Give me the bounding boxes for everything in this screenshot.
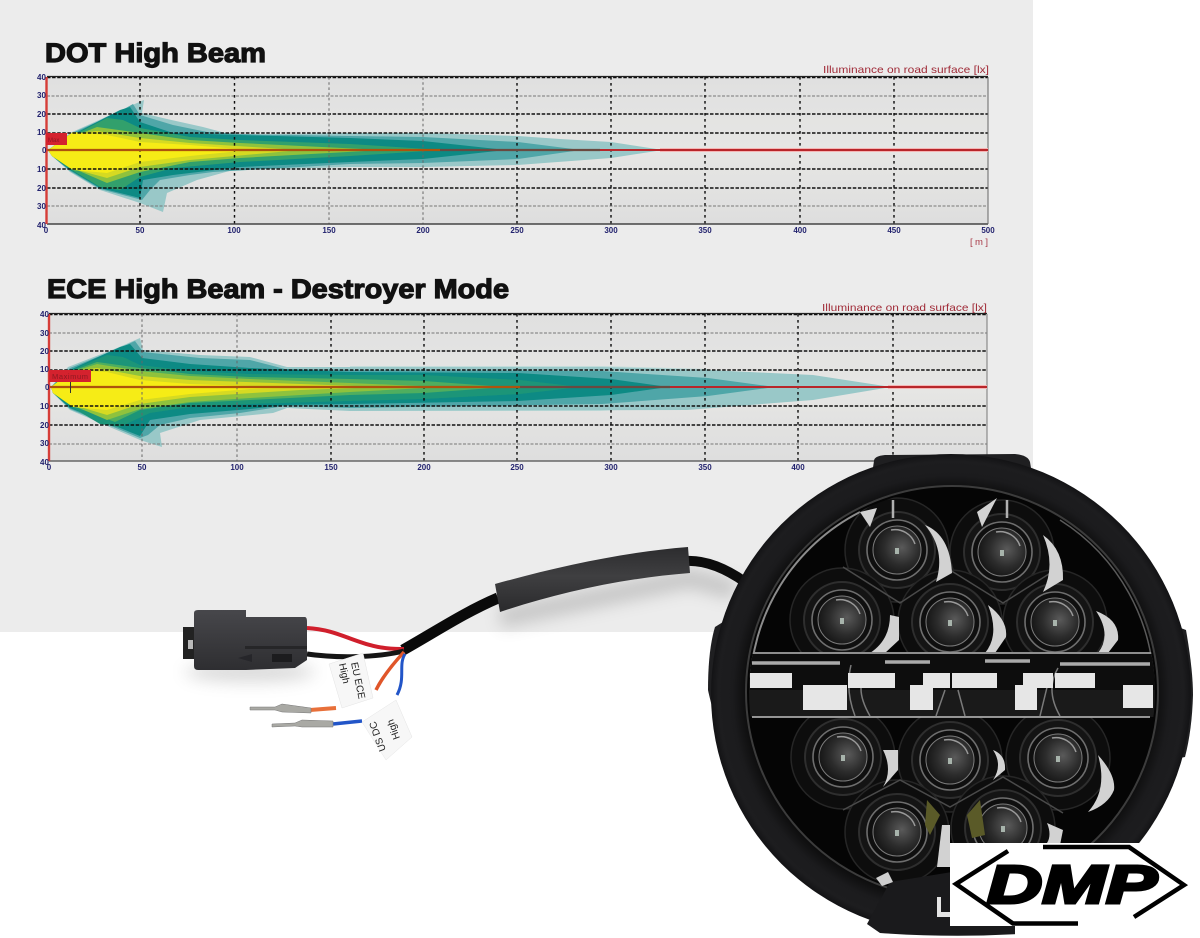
x axis labels: 150 [324,463,338,472]
x axis labels: 0 [44,226,49,235]
x axis labels: 350 [698,463,712,472]
LED module lower centre [898,708,1002,812]
reflector crescents [860,498,1118,867]
connector housing [183,610,307,670]
label: EU ECE High [329,653,373,708]
axes and range line [49,314,987,461]
y axis labels: 10 [40,365,49,374]
y axis labels: 40 [37,73,46,82]
LED module middle right [1002,570,1108,652]
heat shrink sleeve [495,547,690,612]
DMP logo [950,843,1200,938]
lens bezel [746,486,1158,898]
maximum marker [46,133,67,145]
y axis labels: 40 [37,221,46,230]
label: US DC High: US DC [368,720,389,753]
wires [307,628,405,724]
y axis labels: 20 [40,421,49,430]
beam pattern DOT [48,100,663,212]
LED module lower right [1006,706,1110,810]
x axis labels: 200 [416,226,430,235]
beam pattern ECE [51,338,891,447]
panel: DOT high beam chart [37,38,995,248]
y axis labels: 30 [40,329,49,338]
x axis labels: 350 [698,226,712,235]
lower housing plate [867,872,1020,936]
x axis labels [44,226,995,235]
bezel highlight [750,512,860,690]
x axis labels: 300 [604,226,618,235]
axes and range line [46,76,988,224]
grey backdrop panel [0,0,1033,632]
y axis labels [37,73,47,230]
y axis labels: 20 [37,184,46,193]
logo chevron outline [956,847,1184,924]
x axis labels [47,463,805,472]
cast shadows [185,578,735,682]
x axis labels: 250 [510,226,524,235]
y axis labels: 0 [45,383,50,392]
bezel highlight right [1060,520,1154,690]
legend title: Illuminance on road surface [lx] [822,302,987,314]
x axis unit: [m] [970,237,988,248]
horizontal and vertical grid [49,314,987,461]
y axis labels: 10 [37,165,46,174]
LED module top left [845,498,949,602]
x axis labels: 200 [417,463,431,472]
wiring harness [183,547,745,760]
heading: DOT High Beam: DOT High Beam [45,38,266,68]
legend title: Illuminance on road surface [lx] [823,64,989,76]
heading: ECE High Beam Destroyer Mode: ECE High Beam - Destroyer Mode [47,274,509,304]
y axis labels: 0 [42,146,47,155]
plate glint [876,872,893,886]
y axis labels [40,310,50,467]
cell dividers [843,567,1063,813]
y axis labels: 40 [40,310,49,319]
y axis labels: 30 [37,91,46,100]
x axis labels: 50 [136,226,145,235]
x axis labels: 500 [981,226,995,235]
plate badge [937,897,950,917]
label: EU ECE High: High [336,662,351,685]
horizontal and vertical grid [47,77,988,224]
x axis labels: 300 [604,463,618,472]
olive reflections [925,800,985,838]
LED module middle centre [898,570,1002,652]
x axis labels: 100 [227,226,241,235]
LED module bottom right [950,775,1056,843]
y axis labels: 30 [40,439,49,448]
lens internals [748,498,1156,884]
x axis labels: 0 [47,463,52,472]
maximum marker: Maximum [52,372,88,381]
y axis labels: 10 [37,128,46,137]
maximum marker [49,370,91,393]
chrome stems [893,500,1007,518]
main black cable [403,598,498,650]
housing outer ring [711,454,1191,934]
x axis labels: 50 [138,463,147,472]
cable to lamp [686,561,745,582]
DRL segments [750,673,1153,710]
LED module top right [950,500,1054,604]
housing tabs [708,454,1193,760]
y axis labels: 20 [37,110,46,119]
LED module lower left [790,718,896,810]
y axis labels: 30 [37,202,46,211]
x axis labels: 400 [793,226,807,235]
maximum marker: Max [48,138,59,144]
y axis labels: 20 [40,347,49,356]
plot background [49,314,987,461]
terminals [250,704,333,727]
y axis labels: 10 [40,402,49,411]
panel: ECE high beam chart [40,274,987,472]
x axis labels: 450 [887,226,901,235]
label: US DC High: High [385,718,403,741]
DRL light band [748,653,1156,717]
label: EU ECE High: EU ECE [348,661,367,700]
logo white panel [950,843,1200,926]
logo wordmark: DMP [987,855,1158,915]
LED module middle left [789,567,894,652]
x axis labels: 100 [230,463,244,472]
x axis labels: 150 [322,226,336,235]
x axis labels: 400 [791,463,805,472]
x axis labels: 250 [510,463,524,472]
LED module bottom left [845,780,949,884]
y axis labels: 40 [40,458,49,467]
label: US DC High [362,700,412,760]
plot background [47,77,988,224]
headlamp [708,454,1193,936]
